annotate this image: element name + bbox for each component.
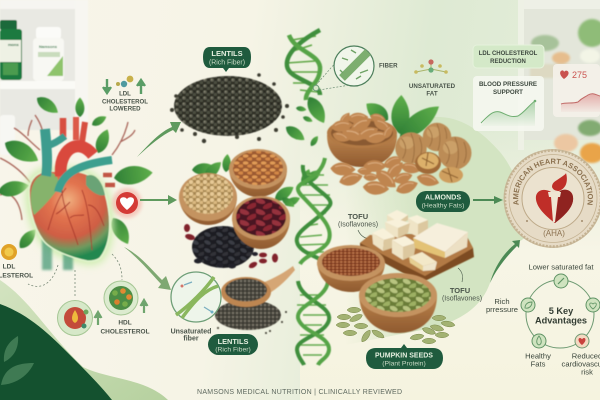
label: lentils lower: [208, 334, 258, 355]
chia pile with wooden spoon: [215, 266, 295, 334]
tofu cubes: [372, 210, 428, 260]
arrow: almonds to seal: [473, 196, 503, 204]
left green chamber: [31, 173, 58, 215]
bottom left wave: light green: [0, 280, 168, 400]
text: 5 key advantages: 5 Key: [549, 306, 574, 316]
icon: white supplement bottle: [33, 27, 64, 81]
text: lower saturated fat: Lower saturated fat: [528, 262, 594, 272]
label: pumpkin seeds: PUMPKIN SEEDS: [375, 352, 433, 360]
circle: fiber closeup: [313, 46, 374, 91]
card: heart rate 275: 275: [572, 70, 587, 80]
AHA heart and torch: [536, 173, 573, 223]
loose almonds: [330, 153, 441, 197]
arrow: badge to beans: [140, 195, 177, 205]
left shelf with supplement bottles: [0, 0, 88, 155]
seal: American Heart Association: [504, 149, 600, 248]
text: HDL cholesterol: CHOLESTEROL: [100, 328, 150, 336]
seal: American Heart Association: (AHA): [543, 229, 565, 238]
card: LDL cholesterol reduction: LDL CHOLESTEROL: [479, 51, 538, 57]
text: LDL cholesterol lowered: LOWERED: [109, 106, 141, 112]
arrow: heart to unsaturated fiber: [124, 247, 171, 290]
legume bowls: [179, 149, 302, 270]
card: LDL cholesterol reduction: [473, 45, 544, 68]
footer: NAMSONS MEDICAL NUTRITION | CLINICALLY REVIEWED: [197, 389, 402, 396]
branches: [0, 115, 135, 220]
node right: [586, 298, 600, 312]
label: tofu lower: TOFU: [450, 286, 470, 295]
arrow: heart to lentils: [137, 122, 181, 157]
text: reduced cardiovascular risk: risk: [581, 368, 593, 376]
icon: HDL cholesterol circle: [104, 281, 138, 315]
icon: green supplement bottle: mons: [8, 42, 19, 47]
lentil pile: [170, 73, 289, 143]
arrow up: [140, 300, 148, 313]
label: lentils: (Rich Fiber): [209, 60, 245, 66]
green wave behind nuts and tofu: [345, 117, 535, 345]
text: rich pressure: Rich: [494, 297, 510, 306]
curve: lower tofu pointer: [458, 268, 463, 282]
text: healthy fats: Healthy: [525, 352, 551, 360]
lower vessels: [42, 238, 73, 270]
chickpea bowl: [179, 173, 237, 225]
orange lentil bowl: [229, 149, 287, 197]
node left: [521, 298, 535, 312]
card: blood pressure support: SUPPORT: [493, 89, 523, 96]
leaves behind bowls: [192, 154, 302, 209]
right green chamber: [86, 175, 105, 196]
card: LDL cholesterol reduction: REDUCTION: [490, 59, 526, 65]
node top: [554, 274, 568, 288]
icon: heart badge: [112, 188, 142, 218]
curve: upper tofu pointer: [358, 230, 369, 239]
card: blood pressure support: BLOOD PRESSURE: [479, 81, 537, 88]
tempeh block: [413, 223, 468, 252]
loose pumpkin seeds right: [410, 315, 455, 344]
coronary veins: [48, 188, 104, 250]
vessels: [45, 117, 115, 192]
icon: white supplement bottle: Namsons: [39, 44, 58, 49]
label: pumpkin seeds: [366, 344, 443, 369]
label: lentils: LENTILS: [211, 49, 243, 58]
text: unsaturated fat: UNSATURATED: [409, 83, 456, 90]
walnuts: [395, 123, 472, 183]
text: fiber: FIBER: [379, 62, 398, 70]
circle: unsaturated fiber closeup: [171, 272, 221, 322]
seal: American Heart Association: AMERICAN HEART ASSOCIATION: [513, 158, 593, 205]
tofu board: [360, 210, 474, 281]
label: almonds: [416, 191, 470, 212]
icon: unsaturated fat molecule: [414, 59, 448, 74]
label: tofu upper: TOFU: [348, 212, 368, 221]
label: lentils lower: LENTILS: [218, 337, 248, 346]
leaves behind almond bowl and walnuts: [362, 95, 444, 144]
LDL cholesterol icon: [1, 244, 17, 260]
icon: lowered cholesterol circle: [58, 300, 92, 336]
DNA helix top: [283, 30, 330, 148]
label: almonds: ALMONDS: [425, 192, 461, 202]
right shelf with blurred vegetables: [518, 0, 600, 163]
card: blood pressure support: [473, 76, 544, 131]
almond bowl: [327, 110, 397, 167]
heart body: [29, 171, 110, 261]
label: tofu upper: (Isoflavones): [338, 222, 378, 228]
ring: 5 key advantages: [521, 274, 600, 348]
text: healthy fats: Fats: [531, 360, 546, 368]
small tempeh piece: [409, 252, 437, 266]
text: unsaturated fiber: Unsaturated: [171, 328, 211, 336]
loose pumpkin seeds left: [336, 307, 385, 343]
arrow up: [94, 312, 102, 325]
bottom left wave: dark green with leaves: [0, 304, 112, 400]
text: rich pressure: prressure: [486, 305, 518, 314]
text: LDL cholesterol: LDL: [3, 264, 15, 270]
text: LDL cholesterol lowered: LDL: [119, 90, 131, 98]
DNA helix lower: [297, 281, 329, 365]
icon: LDL lowered arrows and molecule: [103, 76, 145, 94]
text: 5 key advantages: Advantages: [535, 316, 587, 326]
kidney bean bowl: [232, 196, 290, 249]
heart glow: [29, 171, 110, 261]
pumpkin seed bowl: [359, 273, 437, 333]
label: lentils: [203, 47, 251, 72]
label: lentils lower: (Rich Fiber): [215, 346, 251, 354]
card: heart rate 275: [553, 64, 600, 117]
text: HDL cholesterol: HDL: [118, 320, 132, 326]
text: unsaturated fat: FAT: [426, 90, 438, 98]
heart illustration with leaves: [0, 93, 154, 270]
text: unsaturated fiber: fiber: [183, 336, 199, 342]
text: LDL cholesterol lowered: CHOLESTEROL: [102, 98, 148, 106]
dashed connectors: [28, 254, 122, 298]
leaves around the heart: [0, 93, 154, 251]
node lower left: [532, 334, 546, 348]
label: pumpkin seeds: (Plant Protein): [382, 360, 426, 368]
label: tofu lower: (Isoflavones): [442, 296, 482, 302]
DNA helix middle: [297, 158, 330, 264]
flax bowl: [317, 245, 385, 292]
label: almonds: (Healthy Fats): [422, 202, 464, 210]
black beans: [184, 224, 278, 270]
node lower right heart: [575, 334, 589, 348]
icon: green supplement bottle: [0, 20, 22, 80]
arrow: benefits to seal: [490, 240, 520, 283]
